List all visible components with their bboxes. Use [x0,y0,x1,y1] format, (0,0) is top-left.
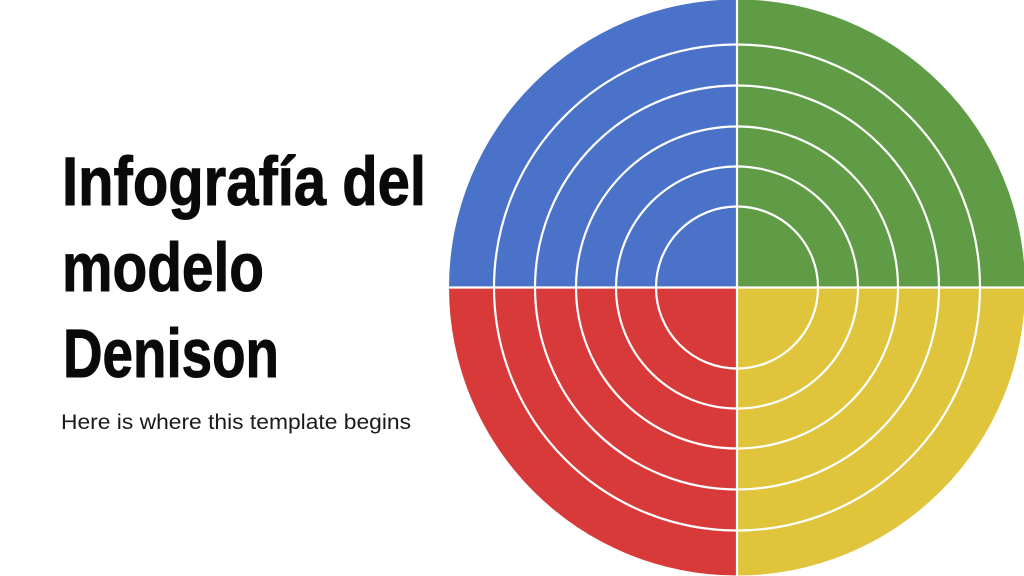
title [62,143,426,392]
ring outlines [449,0,1024,576]
quadrant: green [737,0,1024,288]
concentric quadrant chart [449,0,1024,576]
quadrant: red [449,288,737,576]
title: modelo [62,229,264,306]
title: Infografía del [62,143,426,220]
title: Denison [63,315,279,392]
subtitle: Here is where this template begins [61,411,411,434]
quadrant: yellow [737,288,1024,576]
quadrant: blue [449,0,737,288]
